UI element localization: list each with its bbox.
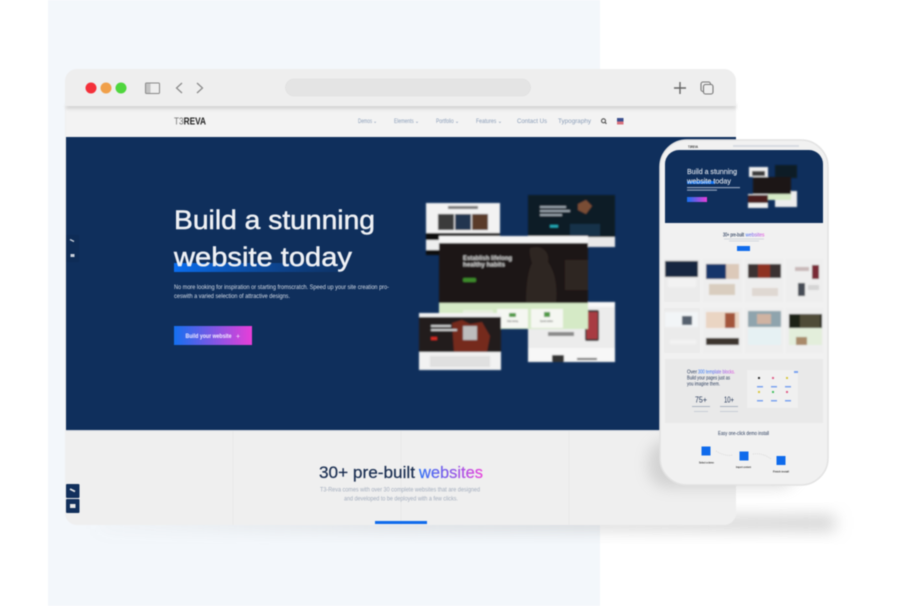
phone section heading: websites xyxy=(745,232,765,238)
blocks dashboard xyxy=(747,370,798,408)
browser toolbar xyxy=(65,69,736,109)
stat: 10+ xyxy=(720,396,738,412)
navigation bar xyxy=(66,106,736,137)
phone demo cards row one xyxy=(664,259,823,302)
hero underline xyxy=(174,263,342,272)
demo screenshots collage xyxy=(419,195,615,370)
phone template blocks section xyxy=(665,359,823,423)
section description: T3-Reva comes with over 30 complete websites that are designed xyxy=(320,486,480,494)
menu items: Elements ⌄ xyxy=(394,119,419,125)
card four xyxy=(786,259,823,302)
hero button xyxy=(174,326,252,345)
phone hero xyxy=(665,150,823,223)
screenshot: bottom left xyxy=(419,313,501,370)
phone section heading: 30+ pre-built xyxy=(723,232,744,238)
phone mockup xyxy=(660,140,828,485)
hero paragraph xyxy=(174,285,389,300)
phone hero heading: Build a stunning xyxy=(687,167,737,176)
phone nav xyxy=(688,145,799,149)
phone hero paragraph xyxy=(687,187,740,191)
address bar xyxy=(286,79,530,96)
step two: Import content xyxy=(736,465,751,469)
browser window xyxy=(65,69,736,525)
screenshot: top left xyxy=(426,203,500,255)
card eight xyxy=(786,308,823,353)
hero heading: website today xyxy=(173,242,353,272)
phone hero heading: website today xyxy=(686,176,731,186)
stat: 75+: 75+ xyxy=(695,396,707,404)
card three xyxy=(745,259,783,302)
blue tab xyxy=(375,521,427,524)
blocks heading: Build your pages just as xyxy=(687,376,730,382)
icon: flag xyxy=(617,118,624,124)
card one xyxy=(664,259,700,302)
browser body xyxy=(65,106,736,525)
screenshot: main center: Special nutrition xyxy=(540,319,553,323)
section description: and developed to be deployed with a few clicks. xyxy=(344,496,458,502)
blocks heading: 300 template blocks. xyxy=(698,370,735,376)
side buttons xyxy=(66,484,80,513)
phone section description xyxy=(724,238,764,242)
phone hero collage xyxy=(748,165,797,208)
phone hero heading xyxy=(686,167,737,186)
background panel xyxy=(48,0,600,606)
icon: sidebar xyxy=(146,83,160,94)
browser drop shadow xyxy=(100,516,835,530)
card seven xyxy=(745,308,783,353)
hero paragraph: No more looking for inspiration or starting fromscratch. Speed up your site creation pro- xyxy=(174,285,389,291)
menu items: Portfolio ⌄ xyxy=(436,119,459,125)
window buttons xyxy=(86,82,126,94)
phone install steps xyxy=(699,446,789,474)
step three: Finish install xyxy=(773,470,789,474)
bottom section xyxy=(66,430,736,525)
icon: plus xyxy=(674,82,686,94)
screenshot: main center xyxy=(439,236,588,329)
menu items: Typography xyxy=(558,119,591,125)
phone hero button xyxy=(687,197,707,202)
phone shadow xyxy=(648,440,798,488)
phone install heading: Easy one-click demo install xyxy=(718,431,769,437)
menu items: Demos ⌄ xyxy=(358,119,377,125)
phone nav: T3REVA xyxy=(688,145,698,149)
step one: Select a demo xyxy=(699,460,714,464)
arrow two xyxy=(753,454,771,459)
blocks heading: Over xyxy=(687,370,697,376)
section description xyxy=(320,486,480,502)
stat: 10+: 10+ xyxy=(724,396,734,404)
phone body xyxy=(660,140,828,485)
menu items: Contact Us xyxy=(517,119,547,125)
hero button: + xyxy=(236,334,240,340)
phone blue button xyxy=(737,246,750,251)
section heading: websites xyxy=(418,463,483,482)
card two xyxy=(703,259,742,302)
stat: 75+ xyxy=(692,396,710,412)
hero paragraph: ceswith a varied selection of attractive designs. xyxy=(174,294,290,300)
blocks heading: you imagine them. xyxy=(687,382,720,388)
screenshot headline xyxy=(463,255,512,268)
logo: T3REVA xyxy=(174,116,206,128)
phone demo cards row two xyxy=(664,308,823,353)
card six xyxy=(703,308,742,353)
hero section xyxy=(66,137,736,430)
section heading: 30+ pre-built xyxy=(319,463,415,482)
blocks heading xyxy=(687,370,735,388)
screenshot headline: Establish lifelong xyxy=(463,255,512,262)
screenshot: main center: Daily training xyxy=(507,319,518,323)
hero button: Build your website xyxy=(186,334,232,340)
phone hero underline xyxy=(687,181,715,184)
screenshot: bottom right xyxy=(528,302,615,362)
card five xyxy=(664,308,700,353)
arrow one xyxy=(716,451,733,455)
hero heading: Build a stunning xyxy=(174,205,375,235)
section heading xyxy=(319,463,483,482)
menu items xyxy=(358,119,591,125)
icon: back and forward chevrons xyxy=(176,83,202,93)
screenshot headline: healthy habits xyxy=(463,262,505,268)
icon: tabs xyxy=(701,82,713,94)
side widget xyxy=(66,235,79,262)
hero heading xyxy=(173,205,375,272)
screenshot: top right xyxy=(528,195,615,247)
menu items: Features ⌄ xyxy=(476,119,502,125)
icon: search xyxy=(602,119,606,124)
